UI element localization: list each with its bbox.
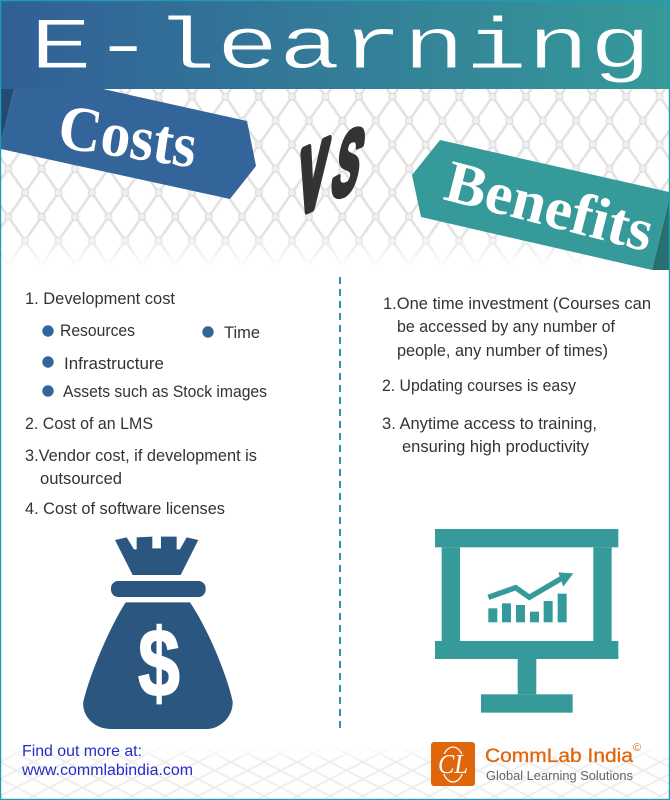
panel: costs list xyxy=(25,290,267,518)
chain-link fence background xyxy=(0,89,670,272)
footer link text: www.commlabindia.com xyxy=(21,762,193,779)
icon: money bag: $ xyxy=(138,610,180,718)
benefit 2: updating: 2. Updating courses is easy xyxy=(382,377,577,395)
ribbon: benefits xyxy=(412,140,669,270)
vs emblem: S xyxy=(324,109,373,217)
logo tagline: Global Learning Solutions xyxy=(486,768,633,783)
title text: E-learning xyxy=(30,7,652,90)
benefit 3: anytime access: 3. Anytime access to training, xyxy=(382,415,597,433)
footer fence background xyxy=(0,745,670,798)
footer link text xyxy=(21,743,193,779)
ribbon label: costs: Costs xyxy=(54,91,202,181)
logo: CommLab India xyxy=(431,742,641,786)
benefit 1: one time investment: 1.One time investment (Courses can xyxy=(383,295,651,313)
logo mark xyxy=(431,742,475,786)
benefit 1: one time investment: people, any number of times) xyxy=(397,342,608,360)
footer link text: Find out more at: xyxy=(22,743,142,760)
logo registered mark: © xyxy=(633,742,641,754)
sub-item: infrastructure: Infrastructure xyxy=(64,355,164,373)
ribbon label: benefits: Benefits xyxy=(439,148,661,264)
vs emblem: V xyxy=(295,122,331,234)
benefit 3: anytime access: ensuring high productivity xyxy=(402,438,590,456)
sub-item: time xyxy=(202,324,260,342)
logo mark: CL xyxy=(438,749,468,779)
sub-item: resources: Resources xyxy=(60,322,135,340)
column divider xyxy=(339,277,341,728)
vs emblem xyxy=(295,109,373,234)
icon: presentation board with rising chart xyxy=(435,529,618,713)
benefit 1: one time investment: be accessed by any number of xyxy=(397,318,615,336)
panel: benefits list xyxy=(382,295,651,456)
logo wordmark: CommLab India xyxy=(485,746,633,767)
item 3: vendor cost xyxy=(25,447,257,488)
benefit 1: one time investment xyxy=(383,295,651,360)
sub-item: assets: Assets such as Stock images xyxy=(63,383,267,401)
item 3: vendor cost: 3.Vendor cost, if development is xyxy=(25,447,257,465)
title banner xyxy=(0,0,670,90)
icon: money bag xyxy=(83,537,233,729)
item 3: vendor cost: outsourced xyxy=(40,470,122,488)
item 2: LMS: 2. Cost of an LMS xyxy=(25,415,153,433)
item 4: licenses: 4. Cost of software licenses xyxy=(25,500,225,518)
item 1: development cost: 1. Development cost xyxy=(25,290,175,308)
sub-item: time: Time xyxy=(224,324,260,342)
ribbon: costs xyxy=(1,89,256,199)
benefit 3: anytime access xyxy=(382,415,597,456)
